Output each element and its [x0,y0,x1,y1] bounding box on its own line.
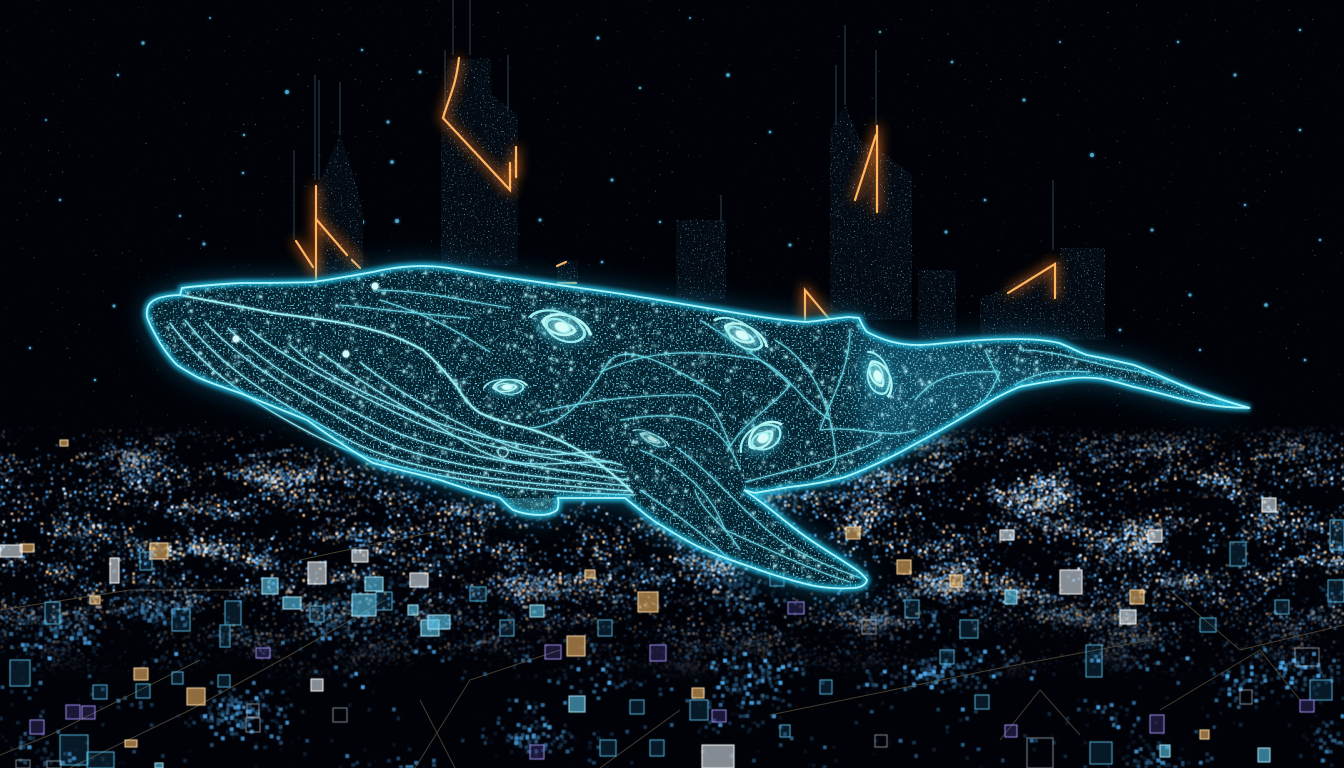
spiral 4 [727,404,799,472]
fine speckles [140,260,1255,595]
mouth line [180,295,633,493]
spiral 6 [627,421,677,457]
large stars [29,17,1321,381]
pale data blocks [0,426,1344,678]
city floor: glowing data points, far field [0,426,1344,678]
galaxy spirals [482,292,907,472]
spiral 3 [849,342,907,410]
whale [140,260,1255,595]
orange light lines: core [296,58,1055,322]
warm data blocks [0,426,1344,678]
orange light lines: soft glow [295,58,1055,322]
network lines [0,530,1344,768]
city floor: sparse data points, near field [0,534,1344,768]
flipper lines [640,447,860,582]
spiral 1 [519,292,605,362]
blue data blocks [0,426,1344,678]
whale outline core [147,266,1250,588]
body veins [340,290,1240,482]
bright star speckles [140,260,1255,595]
pectoral fin small [500,498,558,515]
brighter tail tint [840,322,1197,468]
building window points [300,50,1120,350]
spiral 5 [482,373,532,401]
building base fill [300,50,1120,350]
whale outline glow [147,266,1250,588]
spiral 2 [702,301,782,369]
data cubes [0,440,1344,768]
antenna lines above buildings [294,0,1053,250]
glowing stars on head [232,282,508,457]
starfield speckles [0,0,1344,440]
ventral grooves on throat [170,320,635,495]
whale outer glow [147,266,1250,588]
buildings: wireframe skyline [300,50,1120,350]
whale body fill and texture [140,260,1255,595]
